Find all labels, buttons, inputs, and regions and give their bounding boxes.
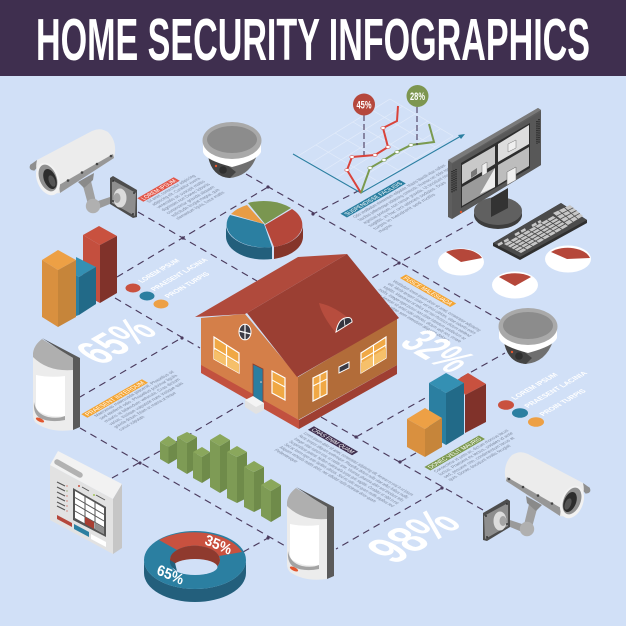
text block: praesent interdum: PRAESENT INTERDUM bbox=[84, 381, 147, 417]
dashed connector network bbox=[80, 174, 505, 552]
text block: cras enim quam bbox=[271, 426, 423, 514]
text block: lorem ipsum: venenatis ac suscipit mattis bbox=[155, 179, 208, 210]
steps bbox=[245, 396, 264, 414]
chart: white pie 3 bbox=[545, 246, 591, 272]
icon: monitor bbox=[448, 108, 541, 229]
stat: 65%: 65% bbox=[65, 311, 169, 372]
icon: alarm keypad panel bbox=[50, 451, 122, 554]
icon: dome camera top bbox=[202, 122, 262, 178]
text block: cras enim quam: Nunc tempor aliquam scelerisque. Phasellus dictum nulla vitae tellus finibus mollis bbox=[297, 434, 410, 500]
chart: white pie 2 bbox=[492, 272, 538, 298]
text block: cras enim quam: CRAS ENIM QUAM bbox=[309, 428, 356, 455]
text block: cras enim quam: Lorem ipsum dolor sit amet, consectetur adipiscing elit. Aenean et erat in ut ipsum bbox=[301, 431, 415, 497]
text block: lorem ipsum: LOREM IPSUM bbox=[140, 179, 179, 201]
left wall bbox=[201, 314, 299, 420]
legend dots right bbox=[498, 400, 544, 427]
text block: praesent interdum: varius, tristique vulputate nunc tristique quis bbox=[108, 381, 186, 426]
legend text: left bbox=[135, 249, 223, 300]
text block: cras enim quam: Aliquam vehicula mattis dolor, nec efficitur nulla molestie dolor quam bbox=[277, 445, 378, 504]
markers bbox=[345, 126, 413, 172]
window small bbox=[272, 371, 285, 400]
icon: security camera top left bbox=[30, 129, 137, 218]
right wall bbox=[298, 318, 397, 420]
text block: suspendisse: sagittis, in hac orci ultricies sodales. Duis bbox=[367, 181, 449, 228]
text block: praesent interdum bbox=[81, 366, 201, 435]
icon: keyboard bbox=[493, 203, 587, 260]
icon: dome camera right bbox=[498, 308, 558, 364]
roof bbox=[195, 254, 399, 377]
legend text: right: LOREM IPSUM bbox=[509, 371, 560, 401]
window left bbox=[214, 337, 239, 373]
icon: motion sensor left bbox=[33, 338, 80, 431]
callout: 28%: 28% bbox=[410, 91, 425, 103]
text block: lorem ipsum: elementum ligula, fusce mattis bbox=[175, 191, 227, 221]
text block: suspendisse: faucibus pellentesque adipiscing commodo. Vivamus nec dolor eget bbox=[357, 166, 453, 222]
chart: left 3D bars bbox=[42, 226, 117, 327]
text block: fusce malesuada: nunc. Aenean sit amet odio ultricies, dictum velit non, ornare bbox=[371, 291, 463, 344]
text block: suspendisse: turpis in hendrerit sed mollis bbox=[372, 193, 438, 231]
dormer bbox=[319, 303, 353, 333]
text block: praesent interdum: sed eleifend odio. Phasellus pulvinar ligula bbox=[98, 374, 179, 421]
chart: white pie 1 bbox=[438, 248, 484, 276]
text block: praesent interdum: cursus vulputate bbox=[117, 415, 147, 432]
bar: blue bbox=[76, 257, 96, 316]
round window bbox=[239, 324, 251, 340]
stat: 98%: 98% bbox=[354, 502, 474, 571]
callout: 45%: 45% bbox=[356, 100, 372, 112]
icon: motion sensor bottom bbox=[287, 487, 334, 580]
text block: cras enim quam: Pellentesque bbox=[272, 448, 299, 464]
text block: suspendisse: Odio vestibulum elementum vulputate. Mauris blandit vitae nullam bbox=[352, 164, 448, 219]
text block: lorem ipsum bbox=[137, 170, 227, 222]
chart: right 3D bars bbox=[407, 373, 486, 457]
chart: donut bbox=[144, 531, 246, 602]
right plinth bbox=[299, 365, 397, 429]
text block: lorem ipsum: sollicitudin feugiat magna, quis bbox=[170, 188, 222, 218]
bar: blue bbox=[429, 373, 464, 445]
chart: green bars bbox=[160, 432, 281, 522]
header band bbox=[0, 0, 626, 76]
callout: 45% bbox=[353, 94, 375, 116]
text block: fusce malesuada: lacus. Etiam vitae sem interdum aliquam dolor a bbox=[366, 293, 451, 343]
text block: donec velit mauris: sed, posuere non, condimentum lacus at bbox=[442, 436, 517, 479]
window right 2 bbox=[361, 337, 386, 373]
bar: orange bbox=[407, 408, 442, 457]
legend text: right: PROIN TURPIS bbox=[537, 388, 588, 417]
vent bbox=[339, 362, 349, 373]
window right 1 bbox=[313, 371, 327, 401]
text block: lorem ipsum: dignissim non Donec lobortis bbox=[160, 182, 212, 212]
text block: donec velit mauris: luctus. Praesent ex lectus, sodales id ante bbox=[437, 431, 515, 477]
red series bbox=[347, 106, 398, 193]
text block: fusce malesuada: mollis. Integer eget purus non dolor interdum vestibulum ac bbox=[376, 288, 468, 341]
door bbox=[253, 364, 263, 403]
legend text: right: PRAESENT LACINIA bbox=[522, 370, 590, 409]
text block: praesent interdum: gravida dictum. Etiam ac massa ut neque bbox=[112, 391, 178, 429]
callout: 28% bbox=[406, 85, 428, 107]
legend text: left: PRAESENT LACINIA bbox=[148, 256, 210, 292]
text block: suspendisse bbox=[340, 159, 473, 236]
text block: lorem ipsum: adipiscing elit. Curabitur viverra bbox=[150, 177, 202, 207]
legend text: left: LOREM IPSUM bbox=[136, 257, 182, 284]
chart: top line graph bbox=[293, 85, 465, 193]
text block: donec velit mauris: DONEC VELIT MAURIS bbox=[427, 437, 484, 470]
house bbox=[195, 254, 399, 429]
text block: cras enim quam: Sed ac lorem eget ante facilisis ultrices. Sed eu odio sed quam mollis dapibus sed bbox=[282, 443, 396, 508]
left plinth bbox=[201, 365, 299, 429]
text block: praesent interdum: Maecenas malesuada placerat. Phasellus sit bbox=[93, 370, 177, 418]
text block: cras enim quam: Integer vitae rutrum erat, et mattis ante. Vivamus pharetra dolor sed tincidunt felis bbox=[292, 437, 405, 503]
label: 35%: 35% bbox=[203, 532, 234, 559]
label: 65%: 65% bbox=[155, 562, 186, 589]
legend text: right bbox=[509, 362, 605, 418]
green series bbox=[361, 124, 434, 193]
text block: suspendisse: SUSPENDISSE FACILISIS bbox=[343, 181, 405, 217]
bar: orange bbox=[42, 250, 76, 327]
text block: fusce malesuada: FUSCE MALESUADA bbox=[401, 276, 454, 307]
legend text: left: PROIN TURPIS bbox=[162, 271, 212, 299]
stat: 32%: 32% bbox=[389, 322, 487, 379]
text block: donec velit mauris: quis. Donec tincidunt mollis feugiat bbox=[447, 444, 513, 482]
text block: fusce malesuada: Vestibulum lorem ipsum dolor sit amet, consectetur adipiscing bbox=[390, 279, 482, 333]
text block: lorem ipsum: consectetur gravida aliquam bbox=[165, 185, 217, 215]
text block: cras enim quam: Suspendisse potenti. Nullam malesuada turpis quis sagittis. Curabitur et nibh in est bbox=[287, 440, 401, 506]
text block: suspendisse: egestas pretium, non neque gravida. Ut tincidunt risus bbox=[362, 172, 454, 225]
axes bbox=[293, 136, 461, 193]
text block: donec velit mauris: Consectetur id justo ac, dictum rhoncus lacus bbox=[433, 429, 511, 474]
legend dots left bbox=[126, 284, 168, 308]
text block: suspendisse: magna bbox=[377, 224, 394, 234]
chart: 3D pie bbox=[226, 201, 303, 260]
bar: red bbox=[83, 226, 117, 303]
icon: security camera bottom right bbox=[483, 452, 590, 541]
text block: fusce malesuada bbox=[366, 274, 492, 347]
bar: red bbox=[457, 373, 486, 433]
text block: fusce malesuada: sagittis. Maecenas et tellus vel nisi rhoncus dictum eleifend bbox=[381, 285, 473, 338]
text block: fusce malesuada: elit. Morbi tempor dolor vel eros ultrices, vitae lobortis enim bbox=[386, 282, 477, 335]
text block: praesent interdum: mauris at bibendum vehicula. Cras dictum bbox=[103, 378, 182, 424]
text block: lorem ipsum: Sit amet, consectetur adipiscing bbox=[146, 174, 198, 204]
